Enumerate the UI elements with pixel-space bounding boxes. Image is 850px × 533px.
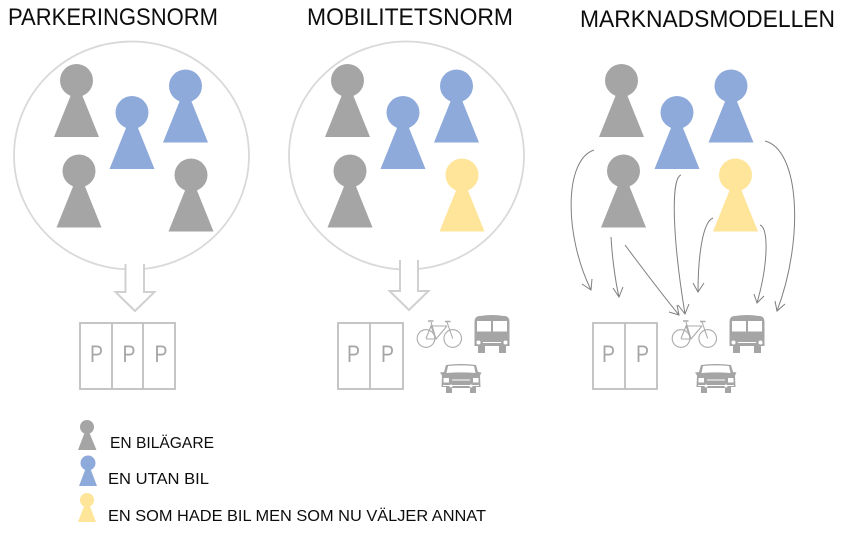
parking spaces: three (80, 323, 175, 389)
parking spaces: two: P (381, 341, 394, 368)
icon: car (440, 364, 482, 393)
legend item: without car (79, 456, 209, 488)
curved arrows from people to transport (571, 141, 795, 315)
legend item: former car owner: EN SOM HADE BIL MEN SOM NU VÄLJER ANNAT (108, 508, 487, 525)
icon: bus (730, 315, 764, 353)
legend item: car owner: EN BILÄGARE (110, 435, 214, 452)
title: mobilitetsnorm: MOBILITETSNORM (307, 4, 513, 31)
people group (599, 64, 758, 232)
arrow: down to mobility (390, 260, 428, 310)
circle boundary (289, 42, 524, 270)
parking spaces: three: P (122, 341, 136, 368)
circle boundary (14, 42, 249, 270)
legend item: former car owner (78, 493, 487, 525)
icon: car (695, 364, 736, 393)
parking spaces: two: P (347, 341, 360, 368)
panel: parkeringsnorm (14, 42, 249, 389)
panel: mobilitetsnorm (289, 42, 524, 393)
icon: bus (474, 315, 510, 353)
title: parkeringsnorm: PARKERINGSNORM (8, 4, 218, 31)
parking spaces: two: P (602, 341, 615, 368)
legend (78, 420, 487, 525)
parking spaces: two (338, 323, 403, 389)
parking spaces: two: P (636, 341, 649, 368)
title: marknadsmodellen: MARKNADSMODELLEN (580, 6, 835, 33)
arrow: down to parking (116, 264, 154, 311)
parking spaces: three: P (90, 341, 103, 368)
legend item: without car: EN UTAN BIL (108, 471, 209, 488)
icon: bicycle (672, 321, 716, 347)
people group (54, 64, 214, 232)
people group (325, 64, 484, 232)
panel: marknadsmodellen (571, 64, 795, 393)
parking spaces: two (593, 323, 657, 389)
parking spaces: three: P (154, 341, 168, 368)
icon: bicycle (417, 321, 462, 347)
legend item: car owner (78, 420, 214, 452)
